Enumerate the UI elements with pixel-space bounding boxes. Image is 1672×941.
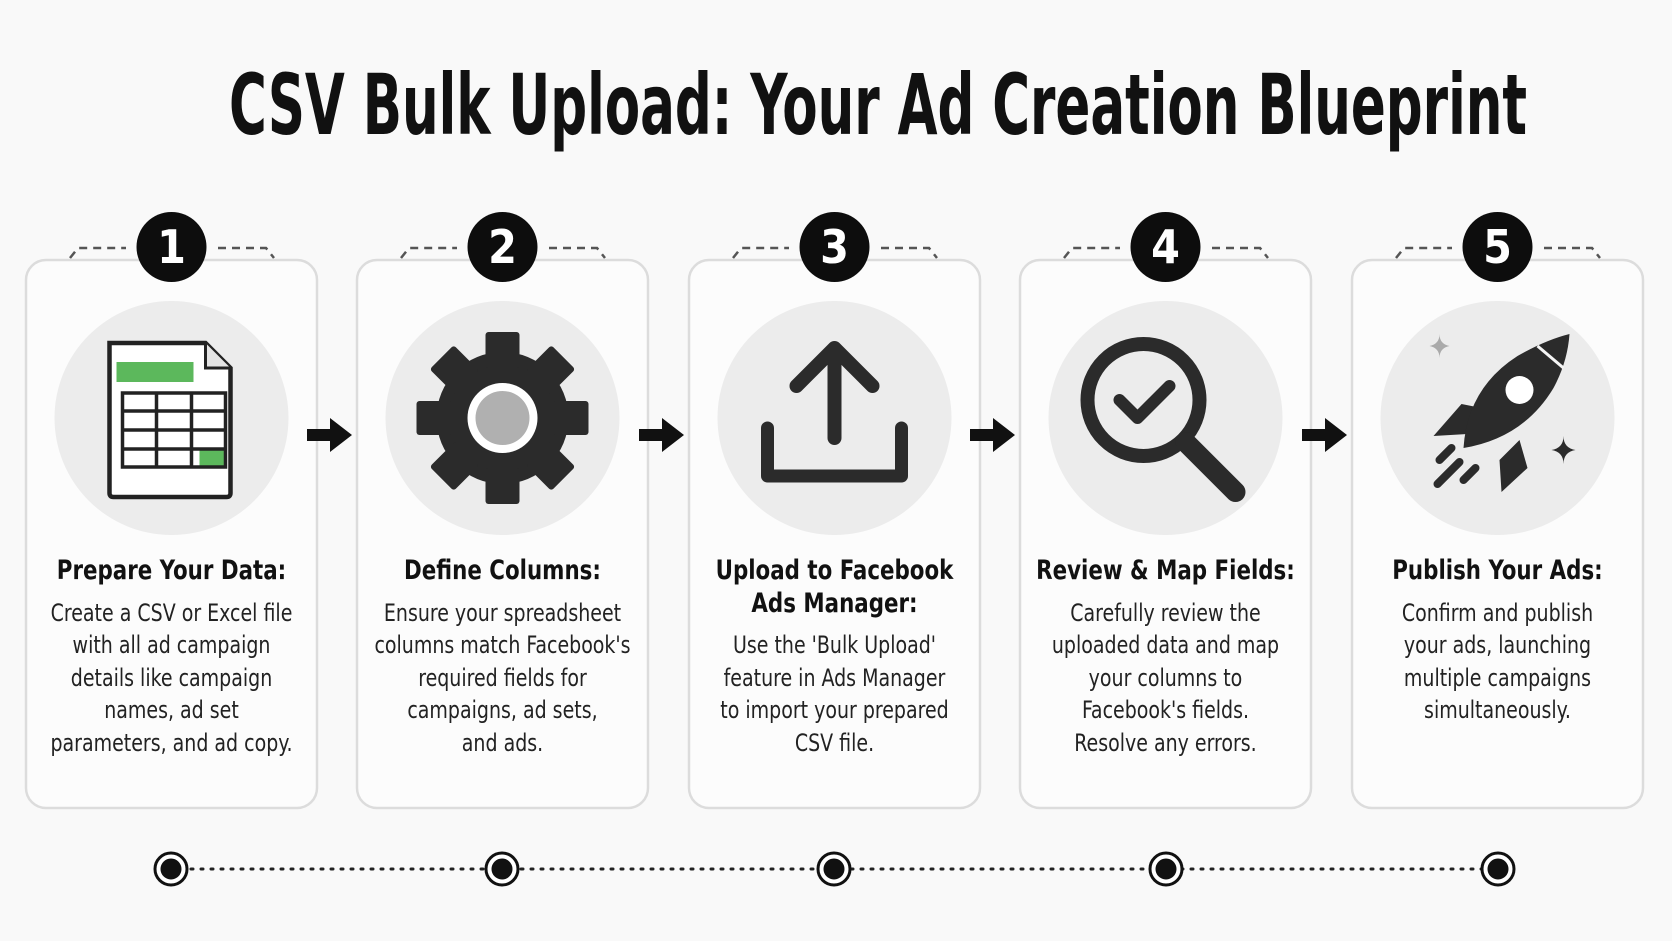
panel: step 2: [357, 212, 648, 808]
panel: step 3: [689, 212, 980, 808]
body text: your ads, launching: [1404, 632, 1591, 659]
arrow 2: [639, 418, 684, 452]
body text: columns match Facebook's: [374, 632, 631, 659]
body text: Ensure your spreadsheet: [384, 600, 621, 627]
icon: rocket: [1430, 334, 1576, 492]
icon: spreadsheet: [110, 343, 230, 497]
panel: step 4: [1020, 212, 1311, 808]
icon: gear: [416, 332, 588, 504]
body text: details like campaign: [71, 665, 272, 692]
body text: simultaneously.: [1424, 697, 1571, 724]
body text: multiple campaigns: [1404, 665, 1591, 692]
step number 1: 1: [157, 220, 186, 274]
timeline: [155, 853, 1514, 885]
body text: uploaded data and map: [1052, 632, 1279, 659]
body text: to import your prepared: [720, 697, 949, 724]
body text: names, ad set: [104, 697, 239, 724]
body text: Create a CSV or Excel file: [51, 600, 292, 627]
step number 2: 2: [488, 220, 517, 274]
step number 3: 3: [820, 220, 849, 274]
body text: Use the 'Bulk Upload': [733, 632, 936, 659]
heading: Upload to Facebook: [716, 554, 954, 585]
body text: parameters, and ad copy.: [50, 730, 293, 757]
icon: upload: [768, 348, 902, 476]
step number 5: [1462, 212, 1532, 282]
step number 3: [800, 212, 870, 282]
body text: with all ad campaign: [73, 632, 270, 659]
body text: required fields for: [418, 665, 587, 692]
heading: Ads Manager:: [751, 587, 918, 618]
arrow 4: [1302, 418, 1347, 452]
heading: Publish Your Ads:: [1392, 554, 1603, 585]
heading: Prepare Your Data:: [57, 554, 286, 585]
panel: step 1: [26, 212, 317, 808]
arrow 1: [307, 418, 352, 452]
heading: Review & Map Fields:: [1036, 554, 1295, 585]
step number 2: [468, 212, 538, 282]
body text: Carefully review the: [1070, 600, 1261, 627]
body text: feature in Ads Manager: [724, 665, 946, 692]
body text: campaigns, ad sets,: [407, 697, 598, 724]
body text: Confirm and publish: [1402, 600, 1593, 627]
body text: and ads.: [462, 730, 543, 757]
step number 4: [1130, 212, 1200, 282]
panel: step 5: [1352, 212, 1643, 808]
body text: Facebook's fields.: [1082, 697, 1249, 724]
step number 4: 4: [1151, 220, 1180, 274]
heading: Define Columns:: [404, 554, 601, 585]
body text: CSV file.: [795, 730, 874, 757]
icon: magnifier check: [1088, 344, 1236, 492]
body text: your columns to: [1089, 665, 1242, 692]
body text: Resolve any errors.: [1074, 730, 1257, 757]
step number 1: [136, 212, 206, 282]
arrow 3: [970, 418, 1015, 452]
step number 5: 5: [1483, 220, 1512, 274]
